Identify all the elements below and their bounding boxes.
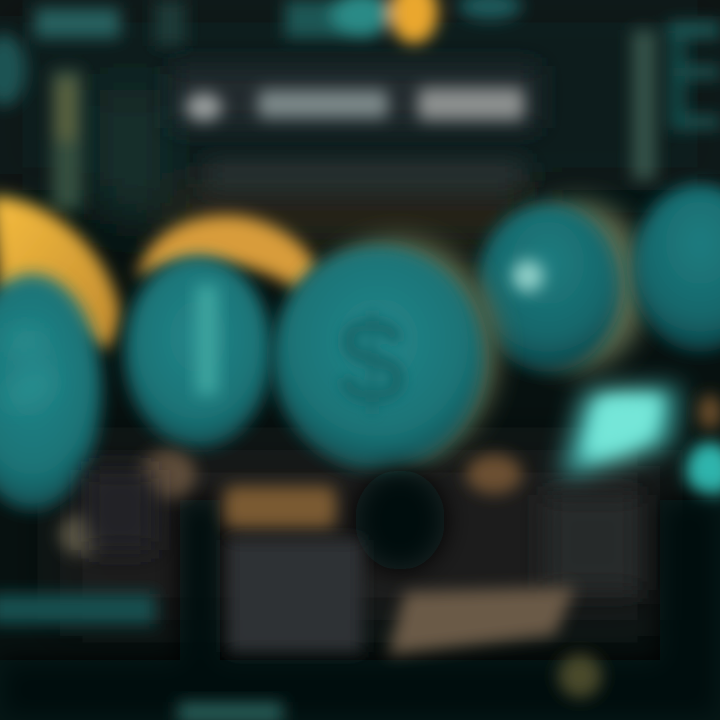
small glowing screen: [686, 442, 720, 498]
balloon center with dollar: [272, 246, 484, 470]
dark shadow band: [0, 470, 720, 720]
glowing screen: [560, 386, 680, 480]
laptop right: [545, 495, 640, 590]
desk tan: [388, 587, 575, 655]
teal desk: [0, 594, 155, 624]
title text, illegible blur: [186, 88, 524, 121]
gold balloon left: [0, 196, 120, 350]
dollar sign: $: [337, 292, 407, 431]
laptop grey: [228, 540, 362, 652]
balloon far right: [632, 184, 720, 352]
figure right head: [466, 454, 522, 494]
laptop left grey: [85, 470, 155, 550]
people and laptops: [0, 394, 720, 720]
tan spot: [698, 394, 720, 430]
title panel: [172, 66, 538, 188]
olive spot: [558, 654, 602, 698]
balloon fourth: [476, 204, 620, 372]
balloon rim center: [298, 238, 498, 462]
balloon left: [0, 274, 102, 510]
balloon glyph: [8, 340, 50, 400]
balloon right back rim: [508, 201, 648, 369]
figure left: [60, 515, 100, 555]
teal bottom: [178, 702, 283, 720]
gold balloon middle: [136, 215, 318, 292]
table gold: [224, 486, 336, 528]
glowing screen core: [585, 396, 662, 458]
balloon glyph: [196, 285, 218, 395]
subtitle, illegible blur: [205, 162, 525, 188]
figure mid head: [140, 450, 196, 498]
title backing: [172, 66, 538, 128]
top backdrop structures: [0, 0, 720, 210]
balloon second: [124, 256, 272, 448]
balloon highlight: [512, 260, 544, 292]
